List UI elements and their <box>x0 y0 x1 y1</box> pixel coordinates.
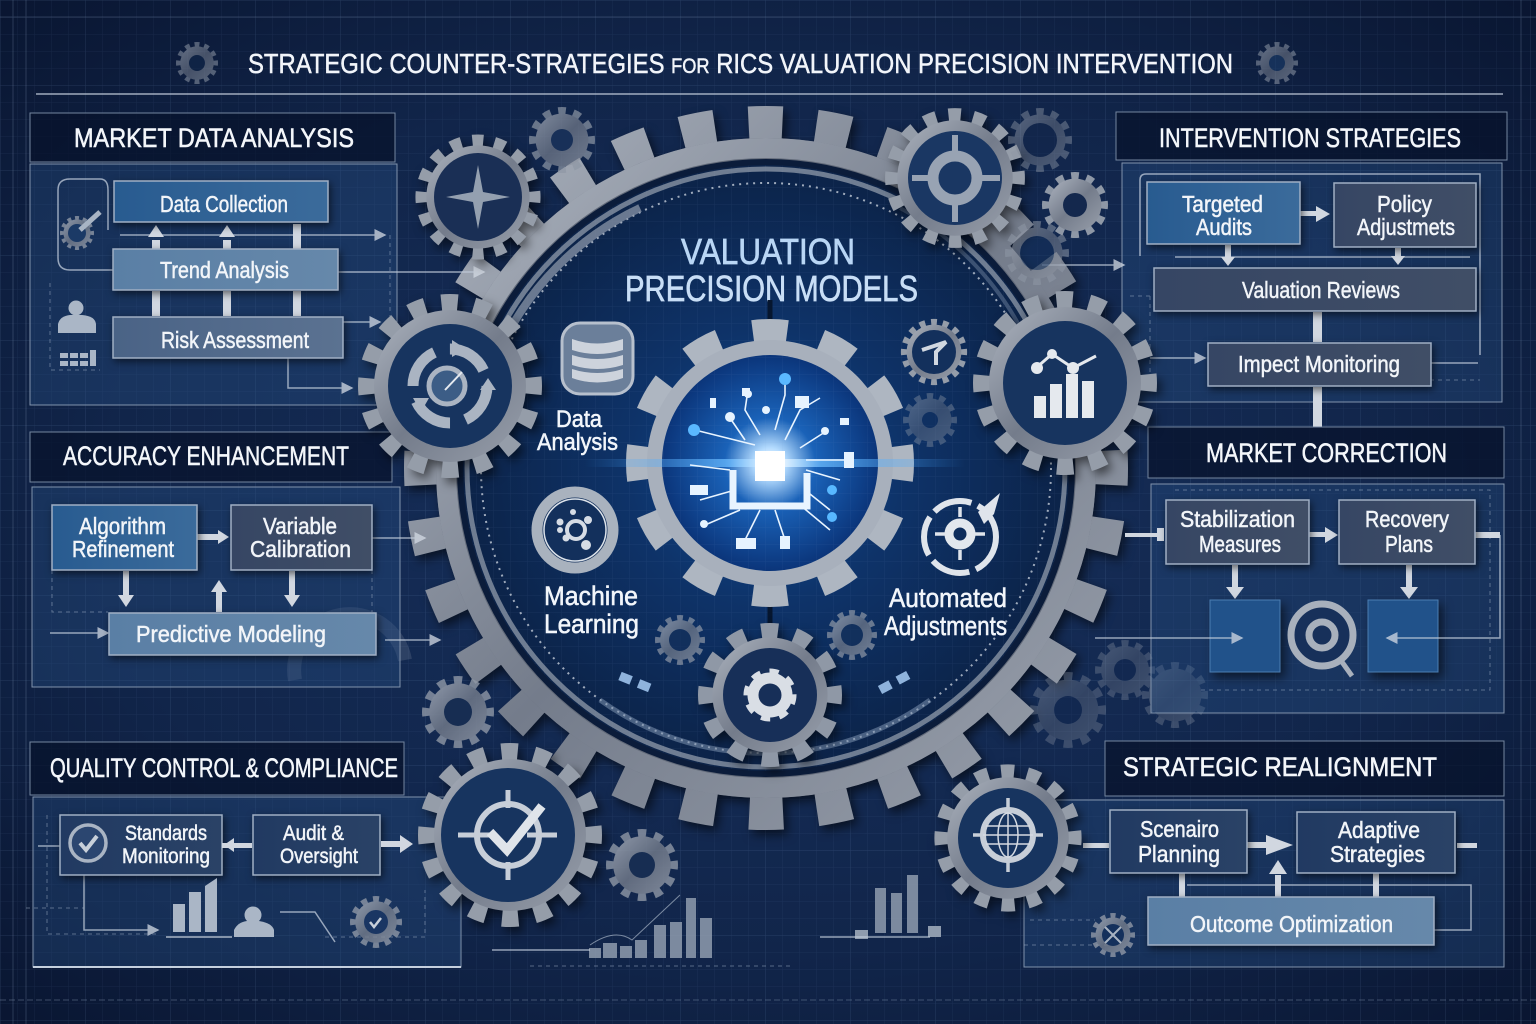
box: variable calibration: Calibration <box>250 536 351 562</box>
heading: valuation precision models <box>625 231 918 309</box>
gear: bottom right with globe <box>942 772 1074 904</box>
body <box>1151 484 1504 713</box>
box: impact monitoring: Impect Monitoring <box>1238 351 1400 377</box>
icon: right title gear <box>1259 45 1295 81</box>
icon: wrench gear <box>62 212 100 248</box>
gear: right large with growth chart <box>982 300 1148 466</box>
box: targeted audits: Audits <box>1196 214 1252 240</box>
connector bars <box>148 224 301 316</box>
box: standards monitoring <box>60 815 222 875</box>
box: outcome optimization <box>1148 897 1434 945</box>
box: audit and oversight <box>253 815 380 875</box>
label: Adjustments <box>884 611 1007 641</box>
box: predictive modeling: Predictive Modeling <box>136 621 326 647</box>
heading: valuation precision models: VALUATION <box>681 231 855 272</box>
chart: bottom centre growth bars <box>492 895 790 966</box>
box: adaptive strategies <box>1297 812 1455 873</box>
label <box>544 581 639 639</box>
gear: top right faded <box>1012 112 1068 168</box>
box: policy adjustments: Policy <box>1377 191 1432 217</box>
box: standards monitoring: Standards <box>125 822 207 845</box>
box: adaptive strategies: Strategies <box>1330 841 1425 867</box>
arrow: to left square <box>1095 637 1242 639</box>
box: variable calibration <box>231 505 372 570</box>
connectors <box>1083 835 1477 897</box>
panel body: strategic realignment <box>1024 800 1504 967</box>
header <box>30 432 392 482</box>
icon: brain gear <box>537 492 613 568</box>
box: audit and oversight: Oversight <box>280 845 358 868</box>
box: algorithm refinement: Algorithm <box>79 513 166 539</box>
box: algorithm refinement: Refinement <box>72 536 175 562</box>
label: Automated <box>889 583 1007 613</box>
label: Learning <box>544 609 639 639</box>
panel: quality control and compliance <box>26 742 461 967</box>
header: INTERVENTION STRATEGIES <box>1159 123 1461 153</box>
arrows <box>222 835 413 853</box>
box: scenario planning: Planning <box>1138 841 1220 867</box>
header: MARKET DATA ANALYSIS <box>74 123 354 153</box>
box: data collection: Data Collection <box>160 191 288 217</box>
box: scenario planning: Scenairo <box>1140 816 1219 842</box>
chip <box>733 470 807 506</box>
panel: accuracy enhancement <box>30 432 440 687</box>
header <box>1148 427 1504 478</box>
box: trend analysis <box>113 249 338 290</box>
label <box>537 406 618 456</box>
box: valuation reviews <box>1154 268 1476 311</box>
header: STRATEGIC REALIGNMENT <box>1123 752 1437 782</box>
box: variable calibration: Variable <box>263 513 337 539</box>
icon: mini bar chart <box>166 878 232 937</box>
icon: database <box>562 323 633 394</box>
gear arc: faded left of accuracy panel <box>294 614 405 680</box>
main gear: valuation precision models <box>421 123 1111 813</box>
box: recovery plans: Recovery <box>1365 506 1449 532</box>
label: Data <box>556 406 603 433</box>
header <box>1116 112 1507 160</box>
gear: top right with crosshair <box>892 115 1018 241</box>
header: MARKET CORRECTION <box>1206 438 1447 468</box>
flare <box>585 459 965 467</box>
box: valuation reviews: Valuation Reviews <box>1242 277 1400 303</box>
nodes <box>688 373 854 549</box>
icon: person <box>58 300 96 333</box>
gear: bottom left with checkmark <box>427 752 593 918</box>
gear: right small <box>1046 176 1104 234</box>
faded gears behind market correction <box>1035 644 1204 743</box>
gear: bottom grey solid <box>610 833 674 897</box>
connectors <box>1125 527 1500 599</box>
icon: gear with check <box>280 899 399 945</box>
box: stabilization measures: Measures <box>1199 531 1281 557</box>
box: targeted audits: Targeted <box>1182 191 1263 217</box>
header <box>30 742 404 795</box>
gear: top left with star <box>422 141 534 253</box>
small gear: bottom right of centre <box>830 613 874 657</box>
small gear: right of centre <box>904 322 964 382</box>
box: predictive modeling <box>109 613 376 655</box>
label: Machine <box>544 581 638 611</box>
icon: left title gear <box>179 45 215 81</box>
body <box>32 487 400 687</box>
box: standards monitoring: Monitoring <box>122 845 210 868</box>
body <box>30 164 397 405</box>
panel: market correction <box>1095 427 1504 713</box>
icon: person <box>234 906 274 937</box>
icon: gear with compass near outcome optimization <box>1094 916 1132 954</box>
box: targeted audits <box>1147 182 1300 244</box>
box: recovery plans: Plans <box>1385 531 1433 557</box>
box: risk assessment <box>113 317 343 358</box>
panel: intervention strategies <box>1042 112 1507 427</box>
box: policy adjustments: Adjustmets <box>1357 214 1455 240</box>
panel: strategic realignment <box>1024 741 1504 945</box>
title <box>179 45 1295 81</box>
box: adaptive strategies: Adaptive <box>1338 817 1420 843</box>
box: impact monitoring <box>1208 343 1431 386</box>
connectors <box>1221 206 1405 427</box>
central gear with AI chip <box>596 300 955 623</box>
box: outcome optimization: Outcome Optimization <box>1190 911 1393 937</box>
gear: left lower <box>426 680 490 744</box>
box: algorithm refinement <box>52 505 197 570</box>
chart: bottom right bars <box>820 875 941 939</box>
small gear: faded <box>906 396 954 444</box>
icon: check badge <box>70 825 106 861</box>
box: blue square right <box>1368 600 1438 672</box>
box: scenario planning <box>1110 810 1247 873</box>
machine learning node <box>537 492 639 639</box>
box: recovery plans <box>1339 500 1475 564</box>
box: policy adjustments <box>1334 183 1476 247</box>
panel body: quality control <box>33 797 461 967</box>
box: stabilization measures: Stabilization <box>1180 506 1295 532</box>
title text: STRATEGIC COUNTER-STRATEGIES FOR RICS VALUATION PRECISION INTERVENTION <box>248 48 1233 79</box>
data analysis node <box>537 323 633 456</box>
heading: valuation precision models: PRECISION MODELS <box>625 268 918 309</box>
box: risk assessment: Risk Assessment <box>161 327 310 353</box>
gear: top small <box>533 111 591 169</box>
body <box>1122 163 1502 402</box>
icon: mini grid <box>60 350 96 366</box>
bottom-centre gear <box>707 632 833 758</box>
icon: cycle with target <box>924 493 1000 573</box>
header: QUALITY CONTROL & COMPLIANCE <box>50 753 398 783</box>
circuit traces <box>690 380 845 540</box>
box: blue square left <box>1210 600 1280 672</box>
arrow: into right square <box>1387 535 1500 638</box>
gear: left large with cycle arrows <box>367 303 533 469</box>
header: ACCURACY ENHANCEMENT <box>63 441 349 471</box>
header <box>1105 741 1504 796</box>
box: trend analysis: Trend Analysis <box>160 257 289 283</box>
box: data collection <box>114 181 328 222</box>
panel: market data analysis <box>30 113 484 405</box>
header <box>30 113 395 162</box>
small gear: bottom left of centre <box>658 618 702 662</box>
icon: target magnifier <box>1291 604 1353 676</box>
label: Analysis <box>537 429 618 456</box>
gear: right faded lower <box>1009 225 1065 281</box>
automated adjustments node <box>884 493 1007 641</box>
box: audit and oversight: Audit & <box>283 822 344 845</box>
box: stabilization measures <box>1166 500 1309 564</box>
label <box>884 583 1007 641</box>
connectors <box>118 530 300 612</box>
